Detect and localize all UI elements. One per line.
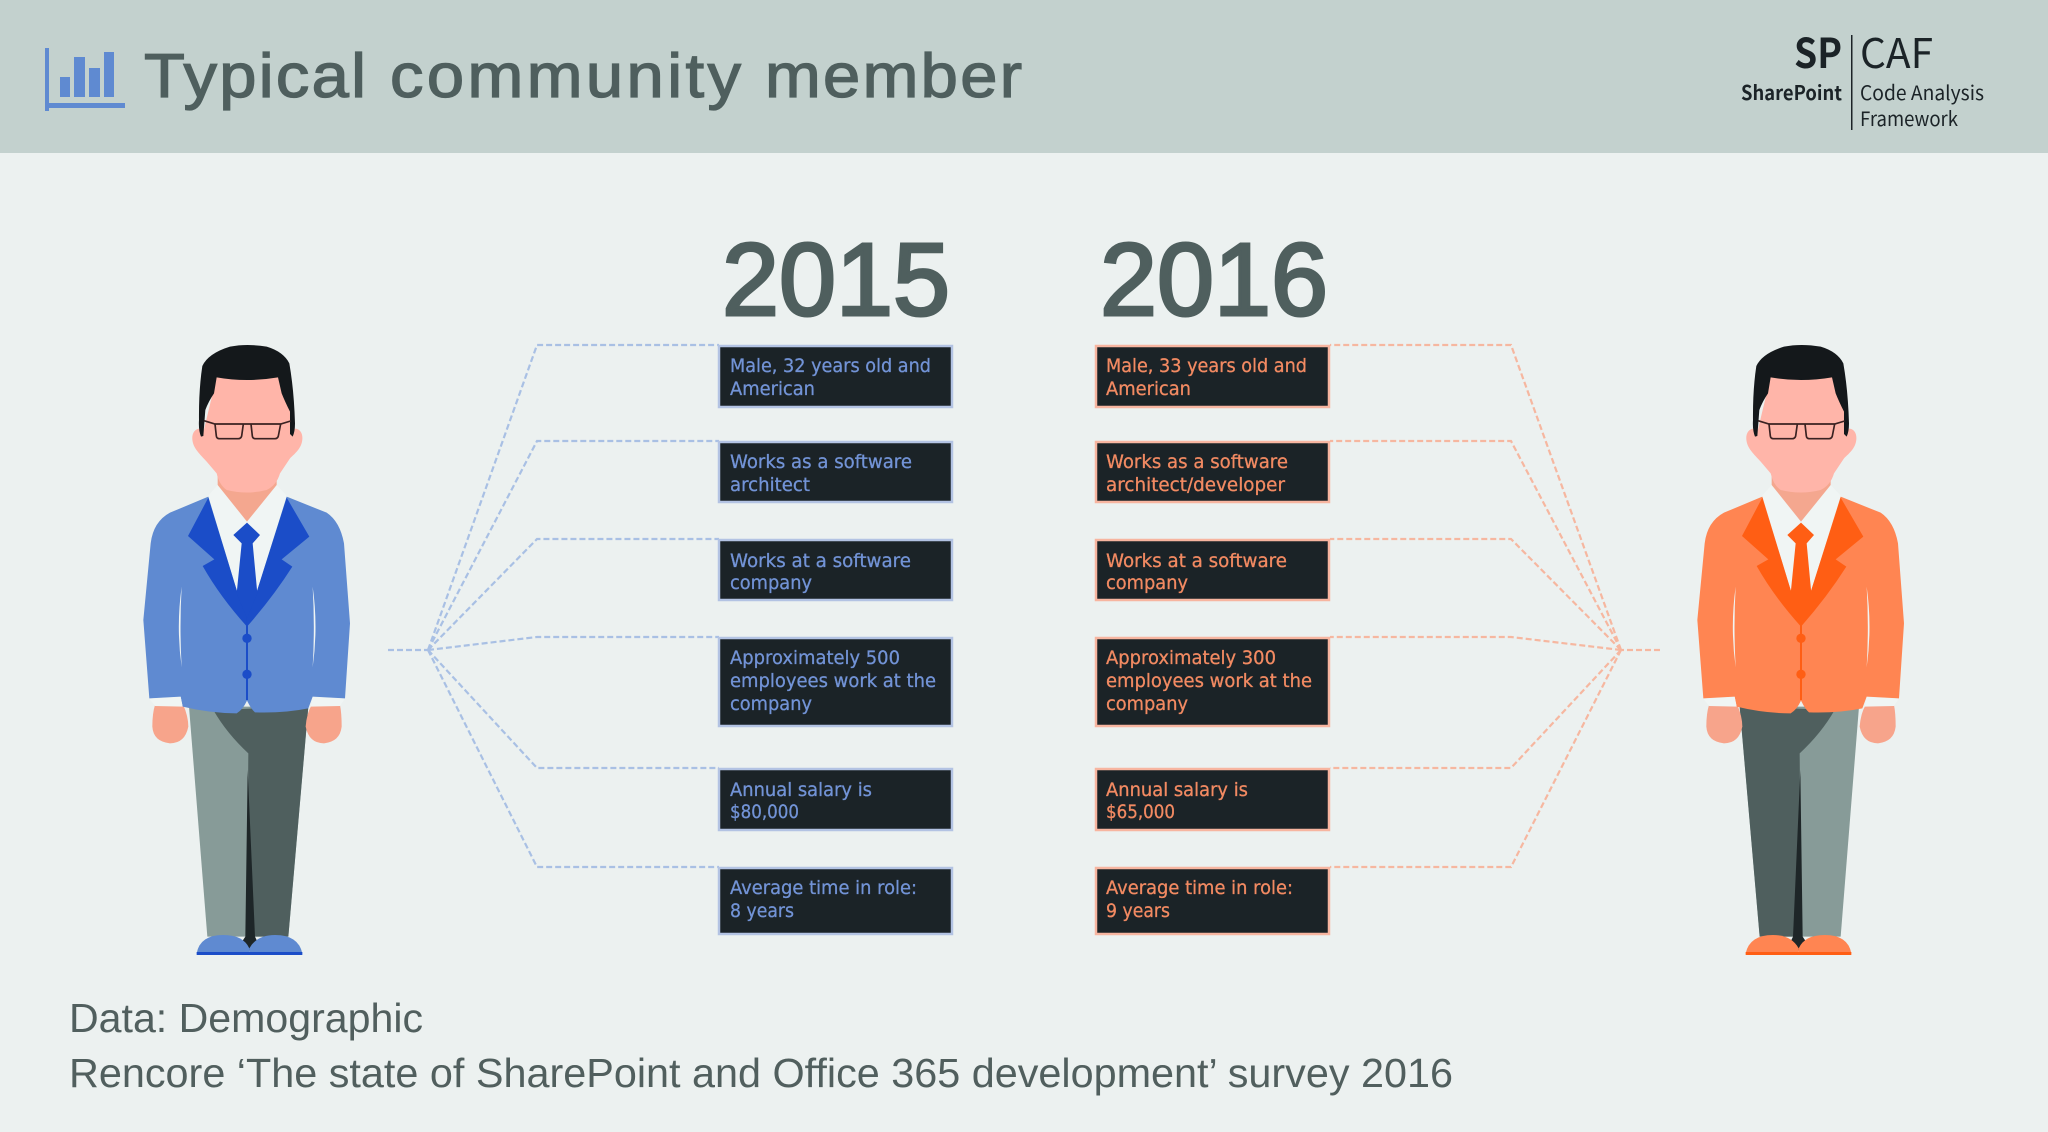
logo: SPCAF: Framework <box>1860 103 1958 132</box>
trousers <box>189 707 308 951</box>
data boxes: 2015 <box>719 346 952 934</box>
title: Typical <box>144 41 366 110</box>
logo: SPCAF: Code Analysis <box>1860 77 1984 106</box>
jacket <box>143 497 350 713</box>
footer: data source: Data: Demographic <box>69 995 423 1041</box>
box: age and nationality 2015 <box>719 346 952 407</box>
logo: SPCAF: CAF <box>1860 20 1933 80</box>
box: company size 2016: employees work at the <box>1106 670 1312 692</box>
jacket <box>1697 497 1904 713</box>
footer: data source <box>69 995 1453 1096</box>
box: company type 2016: company <box>1106 572 1188 594</box>
heading: 2015: 2015 <box>722 222 950 337</box>
box: salary 2016 <box>1096 769 1329 830</box>
box: company type 2016: Works at a software <box>1106 550 1287 572</box>
title <box>144 41 1022 110</box>
title: community <box>390 41 742 110</box>
lapels <box>1742 498 1863 627</box>
box: salary 2015: $80,000 <box>730 801 799 823</box>
lapels <box>188 498 309 627</box>
shoes <box>1746 935 1851 955</box>
box: time in role 2016: 9 years <box>1106 900 1170 922</box>
shirt <box>207 485 288 623</box>
box: company size 2015: company <box>730 693 812 715</box>
face <box>1746 377 1856 492</box>
box: age and nationality 2015: American <box>730 378 815 400</box>
box: age and nationality 2016 <box>1096 346 1329 407</box>
box: age and nationality 2015: Male, 32 years old and <box>730 355 931 377</box>
box: time in role 2015: Average time in role: <box>730 877 917 899</box>
box: time in role 2016: Average time in role: <box>1106 877 1293 899</box>
person: 2016 figure in orange suit <box>1697 345 1904 955</box>
face <box>192 377 302 492</box>
box: role 2015: architect <box>730 474 810 496</box>
connector lines: 2015 <box>388 345 719 867</box>
shoes <box>197 935 302 955</box>
connector lines: 2016 <box>1330 345 1660 867</box>
hair <box>199 345 295 437</box>
shirt <box>1761 485 1842 623</box>
logo: SPCAF <box>1741 20 1984 132</box>
glasses <box>1758 421 1845 439</box>
title: member <box>765 41 1022 110</box>
hands <box>1706 705 1896 743</box>
cuffs <box>149 697 345 707</box>
box: company type 2016 <box>1096 540 1329 600</box>
box: role 2016 <box>1096 442 1329 502</box>
cuffs <box>1703 697 1899 707</box>
box: company type 2015: company <box>730 572 812 594</box>
placket and buttons <box>1796 625 1806 700</box>
box: role 2016: Works as a software <box>1106 451 1288 473</box>
box: role 2016: architect/developer <box>1106 474 1285 496</box>
box: age and nationality 2016: Male, 33 years old and <box>1106 355 1307 377</box>
neck <box>1772 473 1831 523</box>
box: company size 2015: Approximately 500 <box>730 647 900 669</box>
sleeve creases <box>179 587 315 667</box>
neck <box>218 473 277 523</box>
box: time in role 2016 <box>1096 868 1329 934</box>
box: salary 2016: Annual salary is <box>1106 779 1248 801</box>
box: salary 2015: Annual salary is <box>730 779 872 801</box>
trousers <box>1740 707 1859 951</box>
glasses <box>204 421 291 439</box>
logo: SPCAF: SharePoint <box>1741 77 1843 106</box>
sleeve creases <box>1733 587 1869 667</box>
box: role 2015 <box>719 442 952 502</box>
box: company type 2015: Works at a software <box>730 550 911 572</box>
box: company size 2016: company <box>1106 693 1188 715</box>
data boxes: 2016 <box>1096 346 1329 934</box>
box: salary 2016: $65,000 <box>1106 801 1175 823</box>
box: age and nationality 2016: American <box>1106 378 1191 400</box>
footer: data source: Rencore ‘The state of SharePoint and Office 365 development’ survey 2016 <box>69 1050 1453 1096</box>
tie <box>1787 523 1814 618</box>
box: company size 2015 <box>719 638 952 726</box>
box: time in role 2015 <box>719 868 952 934</box>
box: company size 2015: employees work at the <box>730 670 936 692</box>
box: salary 2015 <box>719 769 952 830</box>
hands <box>152 705 342 743</box>
box: company size 2016: Approximately 300 <box>1106 647 1276 669</box>
person: 2015 figure in blue suit <box>143 345 350 955</box>
logo: SPCAF: SP <box>1794 20 1842 80</box>
tie <box>233 523 260 618</box>
hair <box>1753 345 1849 437</box>
box: company size 2016 <box>1096 638 1329 726</box>
box: time in role 2015: 8 years <box>730 900 794 922</box>
icon: bar chart <box>45 48 125 111</box>
box: role 2015: Works as a software <box>730 451 912 473</box>
placket and buttons <box>242 625 252 700</box>
heading: 2016: 2016 <box>1100 222 1328 337</box>
header band <box>0 0 2048 153</box>
box: company type 2015 <box>719 540 952 600</box>
